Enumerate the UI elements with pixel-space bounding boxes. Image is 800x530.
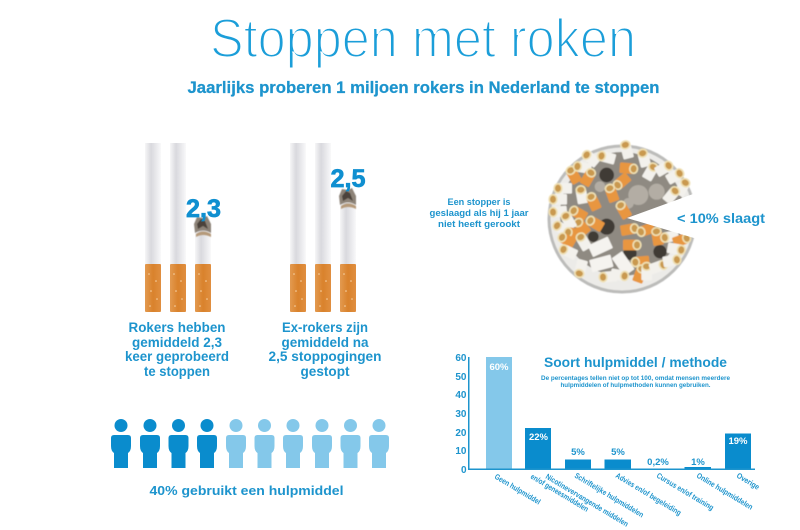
caption: rokers [125,320,229,379]
caption: ex-rokers: gestopt [300,364,350,379]
text: definition of stopper [430,197,529,229]
category labels [493,471,762,529]
title: Stoppen met roken [210,7,636,69]
bar values: 22% [529,432,549,443]
image: ashtray with pie slice [548,139,800,294]
x axis [468,468,755,470]
number: 2,5: 2,5 [330,165,366,193]
bar values: 1% [691,457,705,468]
subtitle: Jaarlijks proberen 1 miljoen rokers in Nederland te stoppen [188,78,660,97]
caption: rokers: te stoppen [144,364,210,379]
y axis: 40 [455,390,467,401]
category labels: en/of geneesmiddelen [529,472,590,514]
number: 2,3: 2,3 [186,195,221,223]
category labels: Geen hulpmiddel [493,472,542,506]
bar values: 5% [611,447,625,458]
category labels: Advies en/of begeleiding [614,471,683,517]
bars [486,357,751,469]
y axis: 60 [455,353,467,364]
caption: ex-rokers: Ex-rokers zijn [282,320,368,335]
chart: soort hulpmiddel [455,353,762,529]
category labels: Cursus en/of training [655,471,715,512]
bar values: 60% [489,362,509,373]
y axis: 20 [455,428,467,439]
chart title: Soort hulpmiddel / methode [544,354,727,370]
caption: rokers: Rokers hebben [128,320,226,335]
chart note: hulpmiddelen of hulpmethoden kunnen gebruiken. [560,383,711,389]
category labels: Schriftelijke hulpmiddelen [573,471,645,520]
category labels: Overige [735,471,762,492]
y axis: 10 [455,446,467,457]
caption: ex-rokers [268,320,382,379]
text: definition of stopper: niet heeft gerookt [438,219,520,229]
caption: rokers: keer geprobeerd [125,349,229,364]
text: definition of stopper: Een stopper is [448,197,511,207]
caption: ex-rokers: 2,5 stoppogingen [268,349,382,364]
bar values [489,362,748,468]
bar values: 0,2% [647,457,669,468]
chart note: De percentages tellen niet op tot 100, omdat mensen meerdere [541,376,731,382]
caption: rokers: gemiddeld 2,3 [132,335,222,350]
y axis: 50 [455,372,467,383]
bar values: 19% [728,436,748,447]
pictogram: 10 people, 4 highlighted [111,419,389,468]
panel: rokers cigarettes [145,143,221,312]
label: less than 10%: < 10% slaagt [677,210,765,226]
category labels: Online hulpmiddelen [695,471,755,512]
y axis: 30 [455,409,467,420]
chart note [541,376,731,389]
panel: ex-rokers cigarettes [290,143,366,312]
y axis [455,353,470,476]
caption: 40% uses an aid: 40% gebruikt een hulpmiddel [150,483,344,498]
text: definition of stopper: geslaagd als hij 1 jaar [430,208,529,218]
bar values: 5% [571,447,585,458]
y axis: 0 [461,465,467,476]
caption: ex-rokers: gemiddeld na [282,335,369,350]
